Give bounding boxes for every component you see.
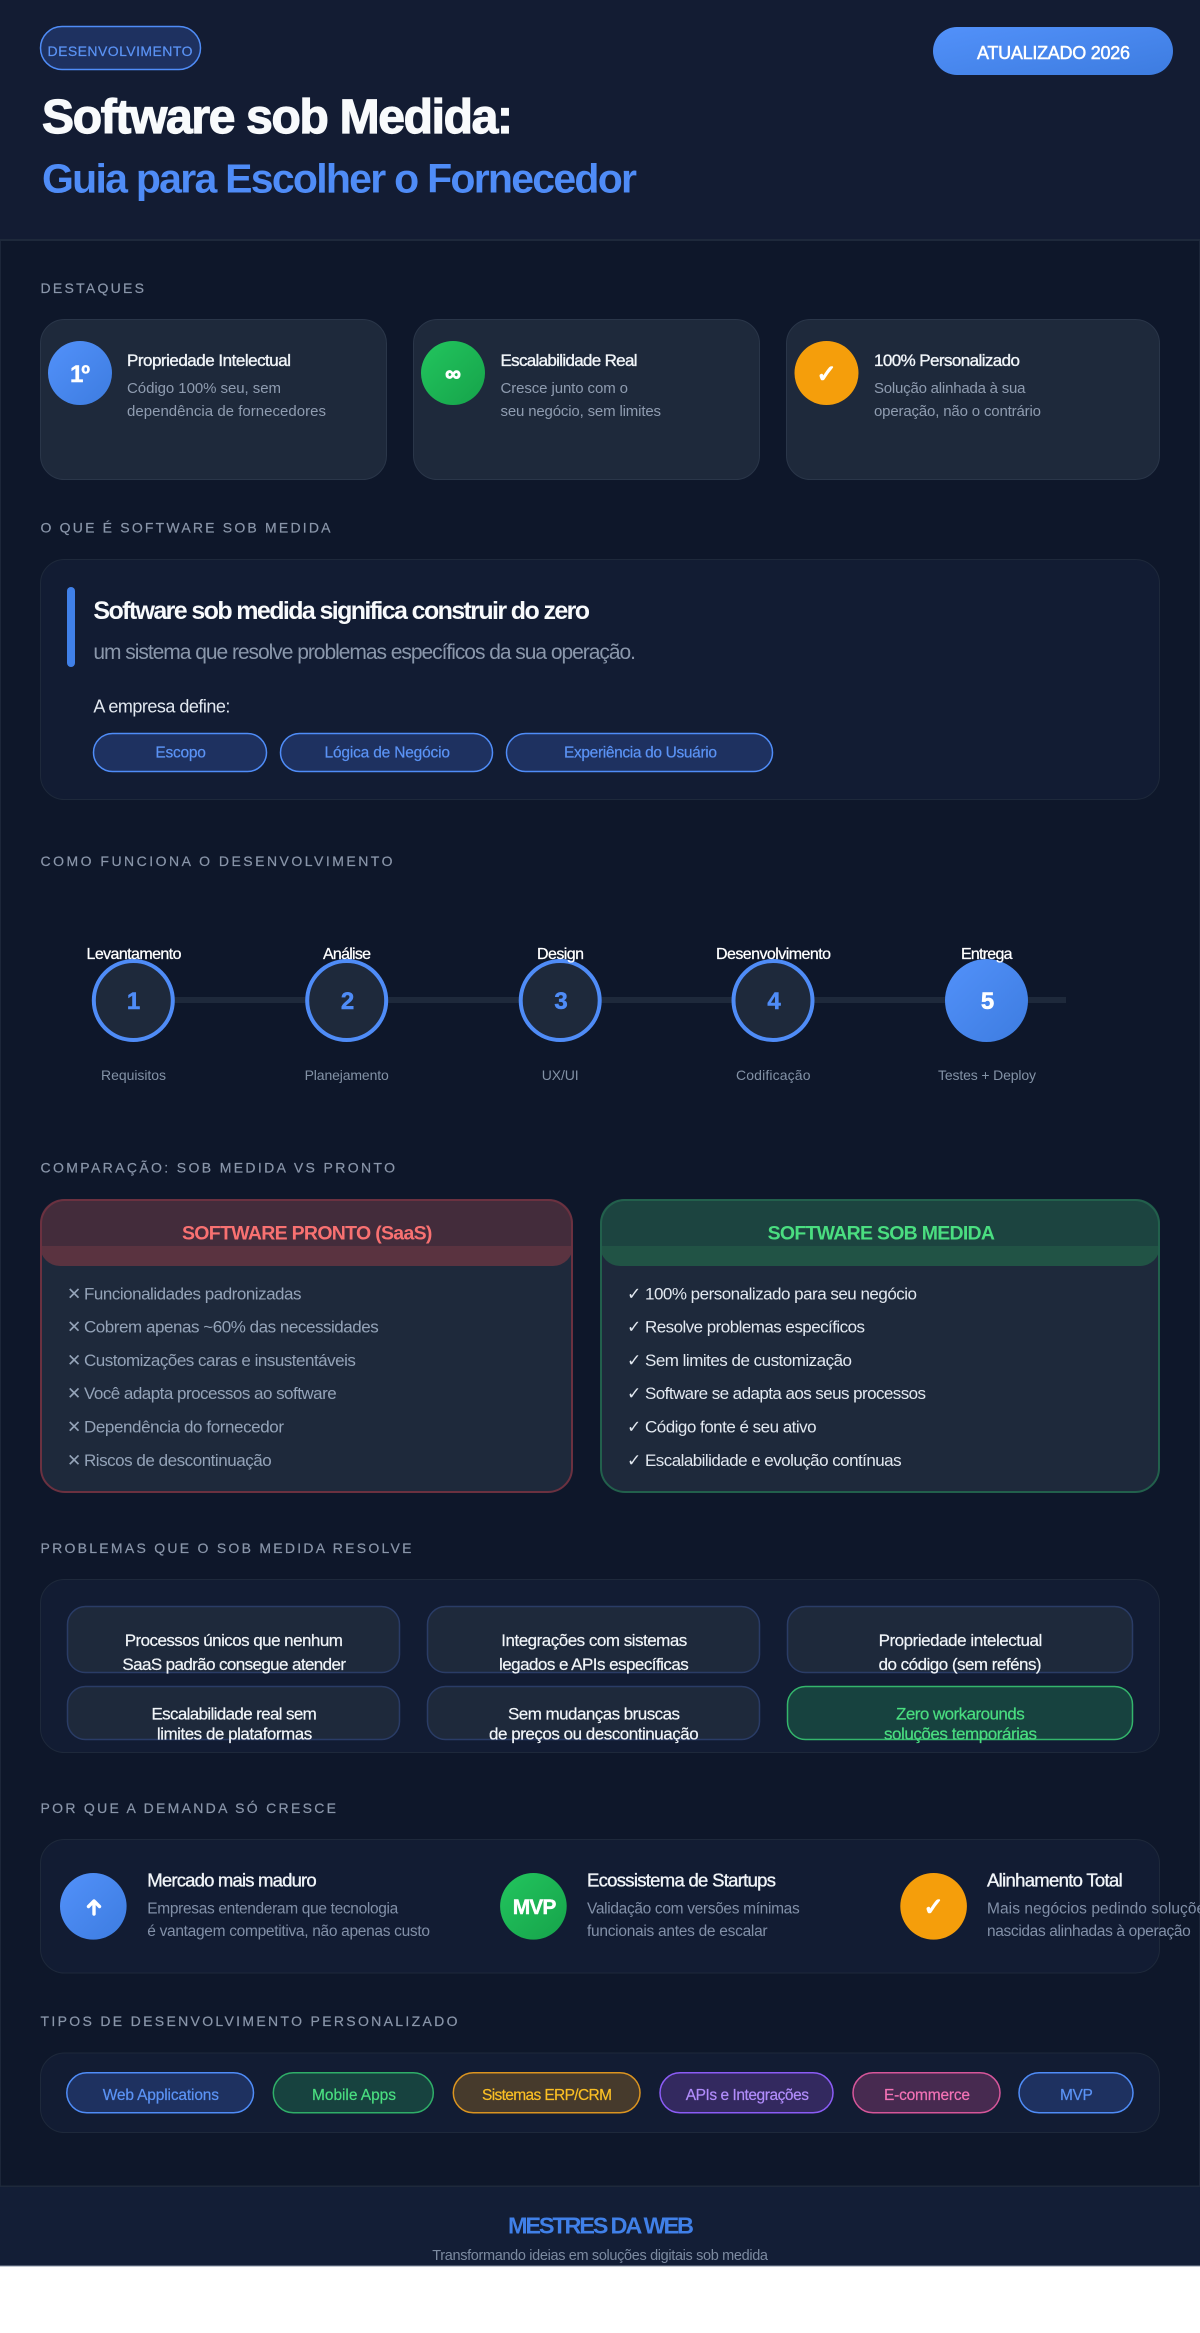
card: propriedade intelectual: Código 100% seu, sem	[127, 380, 281, 397]
problem: zero workarounds: soluções temporárias	[884, 1724, 1037, 1743]
icon: infinito	[421, 341, 485, 405]
list: desvantagens: Customizações caras e insustentáveis	[84, 1351, 356, 1370]
section label: comparação: COMPARAÇÃO: SOB MEDIDA VS PRONTO	[40, 1160, 395, 1176]
problem: mudanças de preços: de preços ou descontinuação	[489, 1724, 699, 1743]
step 3: UX/UI	[542, 1067, 579, 1083]
problem: escalabilidade: limites de plataformas	[157, 1724, 312, 1743]
list: desvantagens: ✕	[67, 1318, 81, 1337]
list: vantagens: ✓	[627, 1318, 641, 1337]
icon: 1º	[48, 341, 112, 405]
chip: mobile apps	[273, 2073, 433, 2113]
step 3	[521, 946, 600, 1083]
problem: mudanças de preços	[428, 1686, 760, 1743]
icon: check: ✓	[816, 361, 837, 388]
step 5: 5	[981, 988, 994, 1015]
list: desvantagens: ✕	[67, 1351, 81, 1370]
list: desvantagens: ✕	[67, 1418, 81, 1436]
chip: lógica de negócio: Lógica de Negócio	[324, 745, 450, 762]
step 1: Levantamento	[86, 946, 182, 963]
item: mercado mais maduro: Empresas entenderam que tecnologia	[147, 1900, 399, 1917]
problem: escalabilidade	[68, 1686, 400, 1743]
item: ecossistema de startups: Ecossistema de Startups	[587, 1870, 776, 1891]
card: propriedade intelectual: Propriedade Intelectual	[127, 351, 291, 370]
panel: demanda	[40, 1840, 1200, 1973]
panel: tipos	[40, 2053, 1160, 2132]
list: vantagens: 100% personalizado para seu negócio	[645, 1284, 917, 1303]
step 2: Análise	[323, 946, 371, 963]
subtitle: Guia para Escolher o Fornecedor	[42, 156, 637, 202]
list: vantagens: Escalabilidade e evolução contínuas	[645, 1451, 902, 1470]
step 4	[716, 946, 831, 1083]
chip: escopo: Escopo	[155, 745, 206, 762]
definition heading: Software sob medida significa construir do zero	[93, 597, 590, 625]
item: alinhamento total: nascidas alinhadas à operação	[987, 1923, 1191, 1940]
problem: escalabilidade: Escalabilidade real sem	[152, 1704, 317, 1723]
chip: mobile apps: Mobile Apps	[312, 2087, 396, 2104]
card: 100% personalizado	[786, 320, 1160, 480]
problem: processos únicos: Processos únicos que nenhum	[125, 1631, 343, 1650]
icon: check	[900, 1873, 967, 1940]
card: escalabilidade real: seu negócio, sem limites	[500, 403, 661, 420]
item: mercado mais maduro: é vantagem competitiva, não apenas custo	[147, 1923, 430, 1940]
list: vantagens: ✓	[627, 1284, 641, 1303]
problem: integrações	[428, 1606, 760, 1674]
section label: como funciona: COMO FUNCIONA O DESENVOLVIMENTO	[40, 853, 393, 869]
step 3: 3	[554, 988, 568, 1015]
header	[0, 0, 1200, 241]
list: desvantagens: Dependência do fornecedor	[84, 1418, 284, 1436]
item: ecossistema de startups: funcionais antes de escalar	[587, 1923, 768, 1940]
icon: infinito: ∞	[445, 361, 461, 386]
list: desvantagens: ✕	[67, 1451, 81, 1470]
step 2: Planejamento	[305, 1067, 389, 1083]
footer brand: MESTRES DA WEB	[508, 2212, 694, 2238]
item: mercado mais maduro: Mercado mais maduro	[147, 1870, 317, 1891]
chip: mvp: MVP	[1060, 2087, 1093, 2104]
section label: o que é: O QUE É SOFTWARE SOB MEDIDA	[40, 520, 331, 536]
step 4: Codificação	[736, 1067, 811, 1083]
list: vantagens: ✓	[627, 1451, 641, 1470]
heading: SOFTWARE SOB MEDIDA	[768, 1222, 995, 1244]
list: vantagens: Resolve problemas específicos	[645, 1318, 865, 1337]
footer tagline: Transformando ideias em soluções digitais sob medida	[432, 2248, 769, 2264]
icon: MVP: MVP	[513, 1896, 556, 1919]
chip: e-commerce	[853, 2073, 1000, 2113]
footer	[0, 2186, 1200, 2266]
icon: seta para cima	[60, 1873, 127, 1940]
icon: check: ✓	[924, 1894, 944, 1921]
problem: zero workarounds	[788, 1686, 1132, 1743]
chip: sistemas erp/crm	[453, 2073, 640, 2113]
card: 100% personalizado: 100% Personalizado	[874, 351, 1020, 370]
card: propriedade intelectual: dependência de fornecedores	[127, 403, 326, 420]
problem: zero workarounds: Zero workarounds	[896, 1704, 1025, 1723]
item: mercado mais maduro	[60, 1870, 430, 1940]
card: escalabilidade real: Cresce junto com o	[500, 380, 628, 397]
chip: experiência do usuário: Experiência do Usuário	[564, 745, 717, 762]
step 5: Entrega	[961, 946, 1013, 963]
badge: desenvolvimento	[40, 26, 200, 70]
list: desvantagens: Cobrem apenas ~60% das necessidades	[84, 1318, 379, 1337]
list: vantagens: Software se adapta aos seus processos	[645, 1384, 926, 1403]
list: desvantagens: Funcionalidades padronizadas	[84, 1284, 302, 1303]
heading: SOFTWARE PRONTO (SaaS)	[182, 1222, 432, 1244]
problem: propriedade intelectual	[788, 1606, 1132, 1674]
step 4: Desenvolvimento	[716, 946, 831, 963]
list: desvantagens: ✕	[67, 1284, 81, 1303]
badge: desenvolvimento: DESENVOLVIMENTO	[48, 43, 193, 59]
problem: propriedade intelectual: do código (sem reféns)	[879, 1655, 1042, 1674]
problem: processos únicos: SaaS padrão consegue atender	[122, 1655, 346, 1674]
badge: atualizado 2026: ATUALIZADO 2026	[977, 43, 1130, 63]
step 5: Testes + Deploy	[938, 1067, 1036, 1083]
list: desvantagens: Riscos de descontinuação	[84, 1451, 272, 1470]
panel: definição	[40, 560, 1160, 800]
list: vantagens: ✓	[627, 1418, 641, 1436]
definition prompt: A empresa define:	[93, 697, 230, 717]
card: propriedade intelectual	[40, 320, 386, 480]
problem: processos únicos	[68, 1606, 400, 1674]
chip: experiência do usuário	[506, 734, 772, 772]
chip: web applications	[67, 2073, 254, 2113]
card: escalabilidade real	[414, 320, 760, 480]
chip: mvp	[1019, 2073, 1133, 2113]
panel: software pronto	[40, 1199, 573, 1492]
panel: destaques	[40, 320, 1160, 480]
section label: destaques: DESTAQUES	[40, 280, 144, 296]
list: vantagens: Código fonte é seu ativo	[645, 1418, 817, 1436]
panel: problemas	[40, 1580, 1160, 1752]
section label: tipos: TIPOS DE DESENVOLVIMENTO PERSONALIZADO	[40, 2013, 458, 2029]
problem: integrações: Integrações com sistemas	[501, 1631, 687, 1650]
step 1	[86, 946, 182, 1083]
chip: apis e integrações	[660, 2073, 833, 2113]
icon: MVP	[500, 1873, 567, 1940]
item: ecossistema de startups	[500, 1870, 800, 1940]
item: alinhamento total	[900, 1870, 1200, 1940]
section label: demanda: POR QUE A DEMANDA SÓ CRESCE	[40, 1800, 336, 1816]
card: escalabilidade real: Escalabilidade Real	[500, 351, 638, 370]
list: desvantagens: ✕	[67, 1384, 81, 1403]
step 1: Requisitos	[101, 1067, 166, 1083]
step 5	[938, 946, 1036, 1083]
chip: web applications: Web Applications	[103, 2087, 219, 2104]
chip: e-commerce: E-commerce	[884, 2087, 970, 2104]
step 1: 1	[127, 988, 140, 1015]
chip: apis e integrações: APIs e Integrações	[686, 2087, 809, 2104]
item: ecossistema de startups: Validação com versões mínimas	[587, 1900, 800, 1917]
section label: problemas: PROBLEMAS QUE O SOB MEDIDA RESOLVE	[40, 1540, 412, 1556]
list: vantagens	[627, 1284, 926, 1470]
card: 100% personalizado: Solução alinhada à sua	[874, 380, 1026, 397]
chip: sistemas erp/crm: Sistemas ERP/CRM	[482, 2087, 612, 2104]
step 2	[305, 946, 389, 1083]
list: vantagens: ✓	[627, 1351, 641, 1370]
step 3: Design	[537, 946, 584, 963]
panel: software sob medida	[600, 1199, 1160, 1492]
accent bar	[67, 587, 75, 667]
title: Software sob Medida:	[42, 91, 513, 144]
step 4: 4	[767, 988, 781, 1015]
list: vantagens: Sem limites de customização	[645, 1351, 852, 1370]
chip: lógica de negócio	[280, 734, 492, 772]
list: desvantagens: Você adapta processos ao software	[84, 1384, 337, 1403]
step 2: 2	[341, 988, 354, 1015]
chip: escopo	[94, 734, 266, 772]
process timeline	[86, 946, 1066, 1083]
item: alinhamento total: Alinhamento Total	[987, 1870, 1123, 1891]
definition text: um sistema que resolve problemas específicos da sua operação.	[93, 641, 636, 664]
icon: 1º: 1º	[70, 361, 90, 388]
badge: atualizado 2026	[933, 27, 1173, 75]
problem: propriedade intelectual: Propriedade intelectual	[879, 1631, 1042, 1650]
problem: mudanças de preços: Sem mudanças bruscas	[508, 1704, 680, 1723]
icon: check	[794, 341, 858, 405]
list: vantagens: ✓	[627, 1384, 641, 1403]
list: desvantagens	[67, 1284, 379, 1470]
problem: integrações: legados e APIs específicas	[499, 1655, 689, 1674]
card: 100% personalizado: operação, não o contrário	[874, 403, 1041, 420]
